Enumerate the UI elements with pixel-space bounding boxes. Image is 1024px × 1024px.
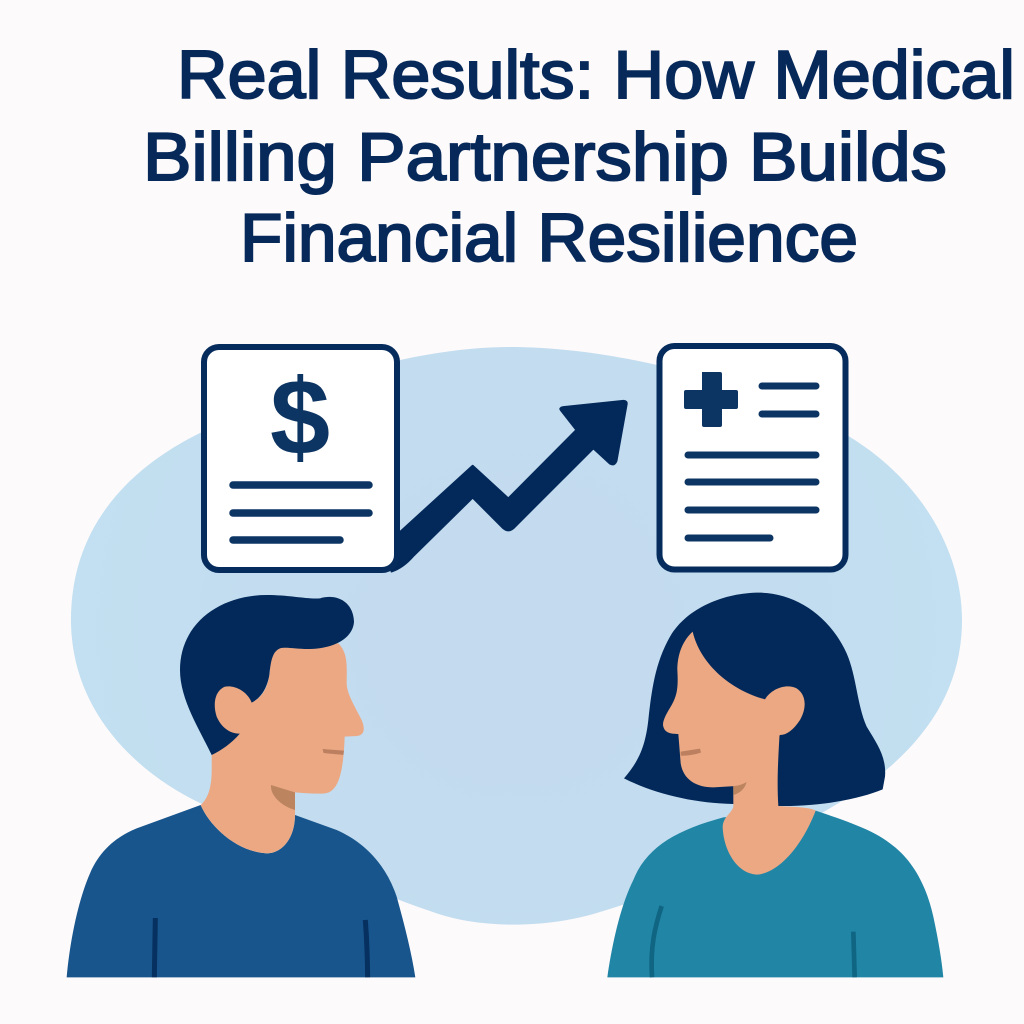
background blob	[71, 347, 962, 925]
title: Financial Resilience	[240, 200, 858, 276]
title: Billing Partnership Builds	[143, 119, 947, 195]
woman figure	[607, 593, 943, 977]
man figure	[67, 595, 415, 977]
icon: billing document	[204, 347, 397, 570]
medical cross	[684, 372, 738, 427]
hair	[180, 595, 354, 755]
face and neck	[201, 643, 364, 853]
neck shadow	[733, 782, 747, 795]
neck and chest	[723, 727, 816, 875]
icon: medical document	[660, 346, 846, 570]
ear	[215, 686, 257, 734]
title	[143, 37, 1015, 276]
document lines	[688, 386, 816, 538]
document lines	[233, 485, 369, 540]
mouth	[323, 749, 344, 755]
shirt	[67, 805, 415, 977]
face	[663, 632, 805, 787]
mouth	[681, 749, 701, 756]
dollar sign: $	[270, 356, 330, 477]
shirt creases	[154, 918, 368, 977]
shirt creases	[652, 906, 855, 977]
hair	[624, 593, 885, 806]
shirt	[607, 811, 943, 977]
icon: growth arrow	[392, 401, 627, 571]
neck shadow	[271, 785, 295, 810]
title: Real Results: How Medical	[177, 37, 1015, 113]
